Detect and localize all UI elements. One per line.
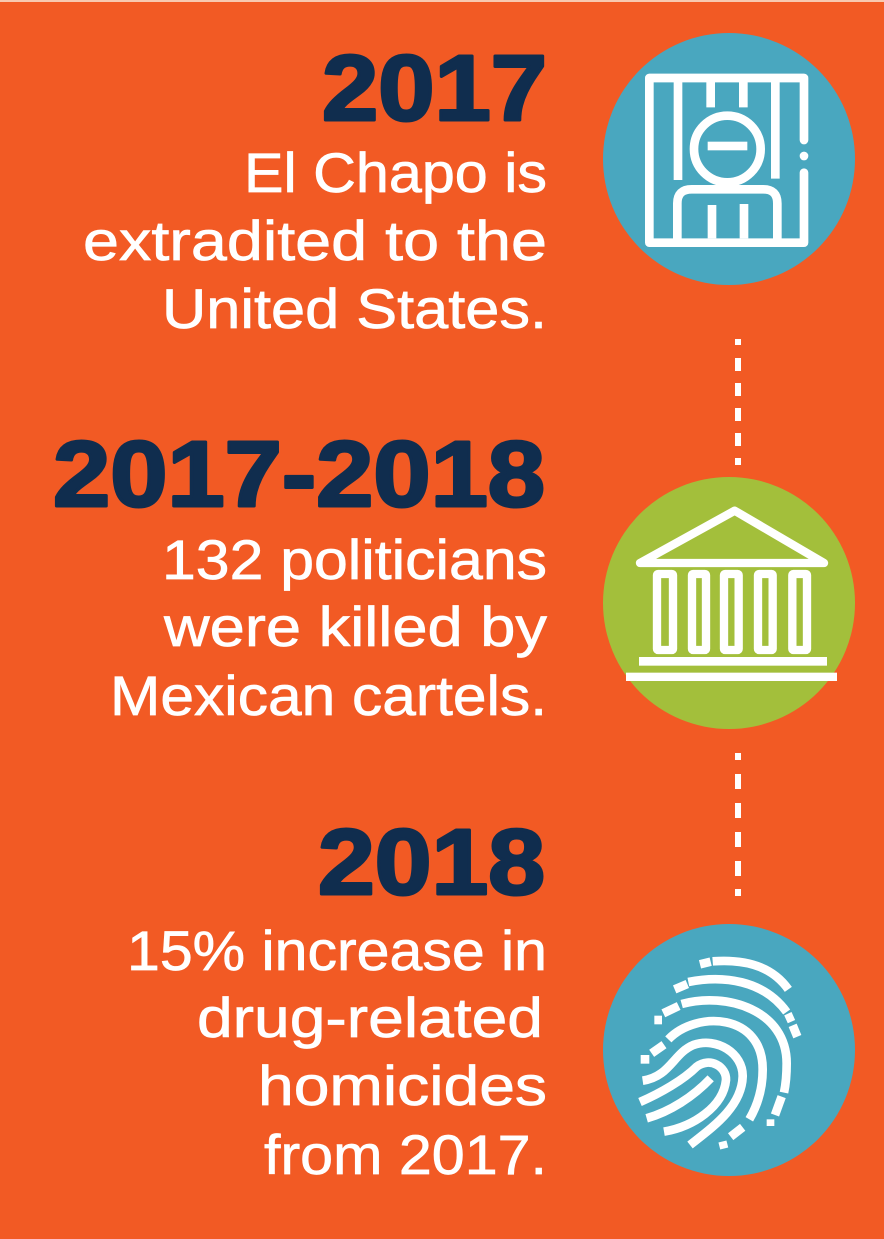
heading: 2017: 2017 (322, 36, 547, 140)
heading: 2017-2018: 2017-2018 (53, 422, 545, 526)
text block: homicides increase: homicides (258, 1054, 547, 1117)
arrow: dashed connector 1 (735, 339, 741, 465)
text block: homicides increase: drug-related (197, 986, 543, 1049)
arrow: dashed connector 2 (735, 753, 741, 896)
text block: politicians killed: Mexican cartels. (110, 664, 547, 727)
heading: 2018: 2018 (318, 810, 545, 914)
icon: government building (603, 477, 855, 729)
text block: politicians killed (110, 528, 547, 727)
text block: El Chapo extradited: extradited to the (83, 209, 547, 272)
icon: prisoner behind bars (603, 33, 855, 285)
text block: El Chapo extradited: United States. (162, 277, 547, 340)
text block: politicians killed: were killed by (163, 595, 547, 658)
text block: El Chapo extradited: El Chapo is (244, 141, 547, 204)
icon: fingerprint (603, 924, 855, 1176)
text block: homicides increase: from 2017. (264, 1123, 547, 1186)
text block: politicians killed: 132 politicians (162, 528, 547, 591)
text block: homicides increase: 15% increase in (127, 919, 547, 982)
text block: El Chapo extradited (83, 141, 547, 340)
text block: homicides increase (127, 919, 547, 1186)
